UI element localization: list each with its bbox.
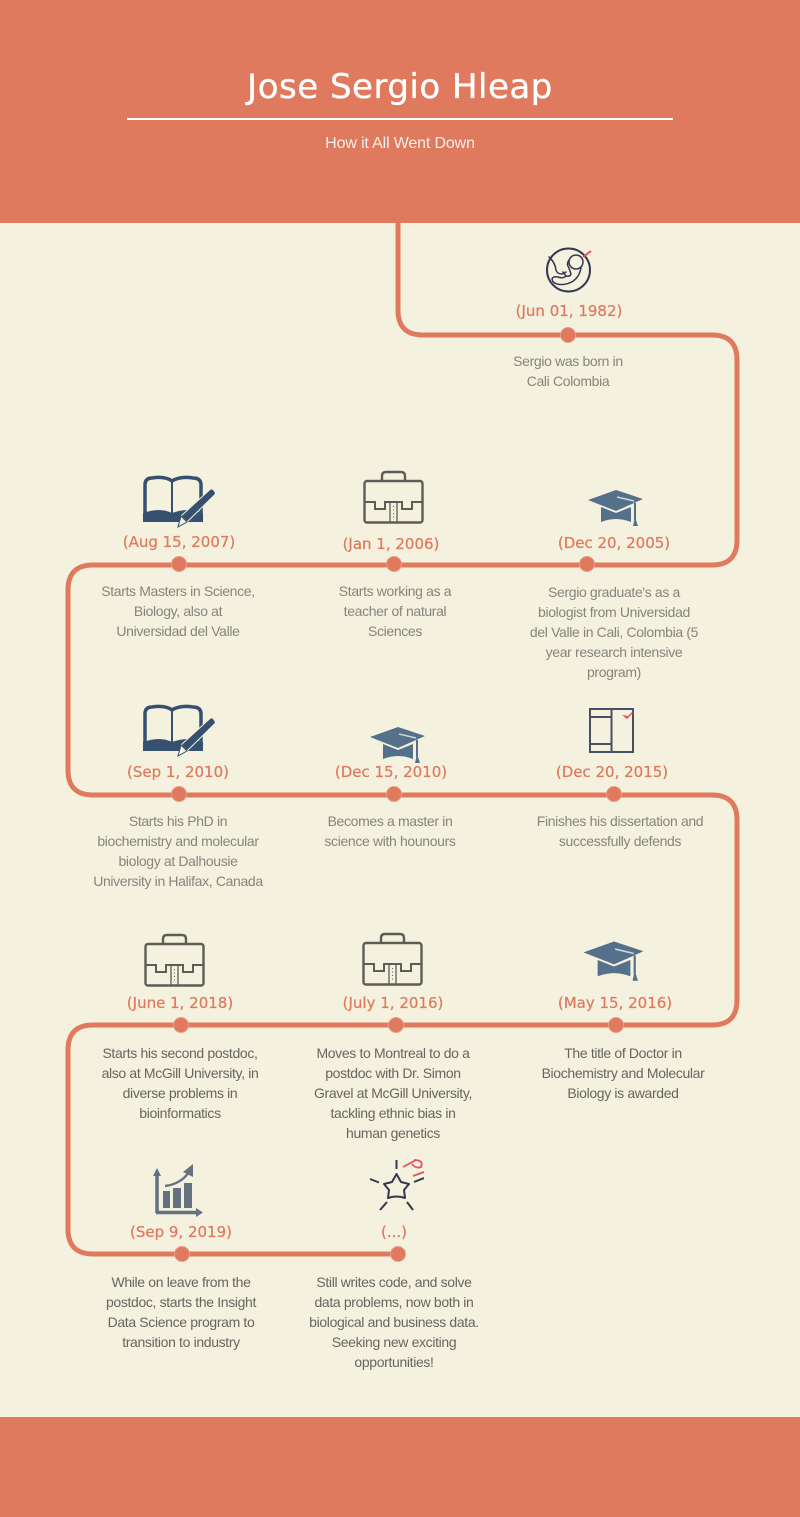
date: May 15, 2016: (May 15, 2016): [558, 994, 672, 1012]
text: master: Becomes a master in: [328, 813, 452, 829]
text: doctor: [542, 1045, 705, 1101]
icon: graduation cap: [584, 942, 644, 981]
text: born: Sergio was born in: [513, 353, 623, 369]
date: Dec 20, 2005: (Dec 20, 2005): [558, 534, 670, 552]
text: doctor: Biochemistry and Molecular: [542, 1065, 704, 1081]
text: masters: Biology, also at: [134, 603, 222, 619]
text: teacher: [339, 583, 452, 639]
text: teacher: teacher of natural: [344, 603, 446, 619]
text: biologist: Sergio graduate's as a: [548, 584, 680, 600]
text: second postdoc: Starts his second postdoc,: [102, 1045, 258, 1061]
text: PhD: biology at Dalhousie: [118, 853, 238, 869]
text: PhD: biochemistry and molecular: [97, 833, 259, 849]
text: masters: Universidad del Valle: [116, 623, 240, 639]
text: masters: Starts Masters in Science,: [101, 583, 255, 599]
icon: briefcase: [363, 470, 424, 524]
text: born: [513, 353, 623, 389]
text: dissertation: [537, 813, 703, 849]
text: second postdoc: bioinformatics: [139, 1105, 221, 1121]
date: ellipsis: (...): [381, 1223, 407, 1241]
icon: book and pencil: [143, 704, 215, 757]
footer band: [0, 1417, 800, 1517]
date: Jun 01, 1982: (Jun 01, 1982): [516, 302, 622, 320]
text: second postdoc: [102, 1045, 258, 1121]
icon: embryo: [546, 248, 592, 292]
date: Jan 1, 2006: (Jan 1, 2006): [343, 535, 439, 553]
icon: briefcase: [362, 932, 423, 986]
text: code: Seeking new exciting: [332, 1334, 456, 1350]
text: code: Still writes code, and solve: [316, 1274, 472, 1290]
text: teacher: Starts working as a: [339, 583, 451, 599]
title rule: [127, 118, 673, 120]
text: PhD: University in Halifax, Canada: [93, 873, 263, 889]
date: Dec 15, 2010: (Dec 15, 2010): [335, 763, 447, 781]
text: PhD: [93, 813, 264, 889]
text: masters: [101, 583, 255, 639]
text: code: opportunities!: [354, 1354, 434, 1370]
text: biologist: program): [587, 664, 641, 680]
text: Insight: [106, 1274, 256, 1350]
icon: graduation cap: [588, 490, 643, 526]
date: June 1, 2018: (June 1, 2018): [127, 994, 233, 1012]
icon: book and pencil: [143, 476, 215, 528]
title: Jose Sergio Hleap: [247, 67, 553, 107]
text: Montreal postdoc: tackling ethnic bias in: [330, 1105, 456, 1121]
icon: growth chart: [153, 1164, 203, 1217]
date: Aug 15, 2007: (Aug 15, 2007): [123, 533, 235, 551]
text: Insight: transition to industry: [122, 1334, 240, 1350]
text: teacher: Sciences: [368, 623, 422, 639]
text: biologist: biologist from Universidad: [538, 604, 690, 620]
text: Montreal postdoc: Moves to Montreal to do a: [316, 1045, 470, 1061]
text: Montreal postdoc: postdoc with Dr. Simon: [325, 1065, 461, 1081]
text: biologist: [530, 584, 698, 680]
date: Sep 9, 2019: (Sep 9, 2019): [130, 1223, 232, 1241]
text: code: [309, 1274, 479, 1370]
text: master: science with hounours: [324, 833, 456, 849]
text: Montreal postdoc: Gravel at McGill University,: [314, 1085, 472, 1101]
text: Insight: Data Science program to: [108, 1314, 254, 1330]
text: code: biological and business data.: [309, 1314, 479, 1330]
text: PhD: Starts his PhD in: [129, 813, 227, 829]
icon: graduation cap: [370, 727, 425, 763]
text: dissertation: successfully defends: [559, 833, 681, 849]
header band: [0, 0, 800, 223]
text: Montreal postdoc: human genetics: [346, 1125, 440, 1141]
date: July 1, 2016: (July 1, 2016): [343, 994, 443, 1012]
text: Insight: postdoc, starts the Insight: [106, 1294, 256, 1310]
subtitle: How it All Went Down: [325, 135, 475, 152]
text: doctor: The title of Doctor in: [564, 1045, 682, 1061]
text: Montreal postdoc: [314, 1045, 472, 1141]
text: born: Cali Colombia: [527, 373, 609, 389]
text: dissertation: Finishes his dissertation and: [537, 813, 703, 829]
text: Insight: While on leave from the: [111, 1274, 251, 1290]
icon: star: [370, 1159, 424, 1211]
text: code: data problems, now both in: [314, 1294, 474, 1310]
text: master: [324, 813, 456, 849]
text: second postdoc: diverse problems in: [123, 1085, 237, 1101]
text: second postdoc: also at McGill University, in: [102, 1065, 258, 1081]
text: biologist: del Valle in Cali, Colombia (5: [530, 624, 698, 640]
text: biologist: year research intensive: [546, 644, 682, 660]
text: doctor: Biology is awarded: [567, 1085, 679, 1101]
icon: briefcase: [144, 934, 205, 987]
icon: dissertation: [589, 708, 634, 753]
date: Sep 1, 2010: (Sep 1, 2010): [127, 763, 229, 781]
date: Dec 20, 2015: (Dec 20, 2015): [556, 763, 668, 781]
